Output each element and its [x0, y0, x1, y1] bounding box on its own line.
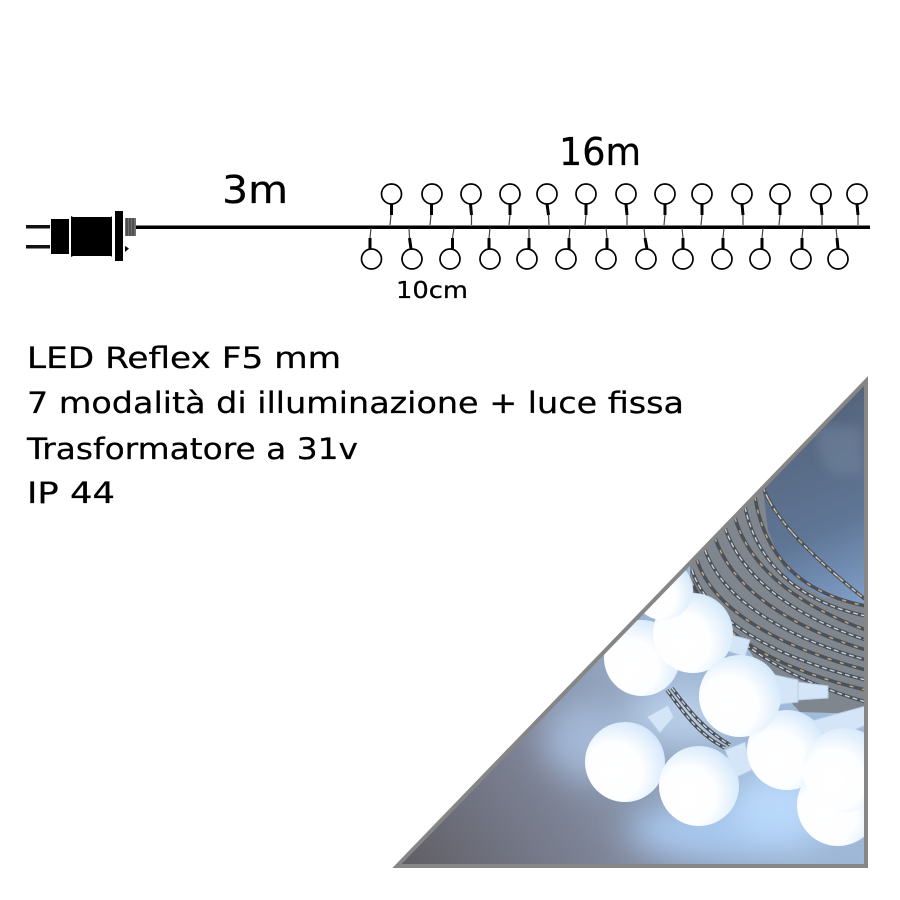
lower row of bulbs [362, 228, 848, 269]
bulb sockets [647, 633, 866, 778]
label: 16m: 16m [559, 130, 641, 174]
blurred glass shape in the background [818, 426, 860, 472]
infographic canvas [26, 136, 870, 868]
photo frame [397, 381, 866, 866]
photo panel: LED string lights in triangle [390, 375, 887, 870]
glowing bulbs [585, 570, 864, 846]
icon: power plug [26, 211, 136, 261]
feature: LED type: LED Reflex F5 mm [27, 341, 341, 375]
feature: lighting modes: 7 modalità di illuminazione + luce fissa [27, 386, 684, 420]
main wire [134, 226, 870, 229]
feature: transformer: Trasformatore a 31v [26, 432, 358, 466]
feature: protection rating: IP 44 [27, 476, 115, 510]
label: 3m: 3m [222, 168, 288, 212]
cable bundle [667, 487, 866, 748]
label: 10cm: 10cm [396, 278, 468, 304]
upper row of bulbs [382, 184, 867, 225]
feature list [26, 341, 684, 510]
cable diagram [26, 130, 870, 304]
